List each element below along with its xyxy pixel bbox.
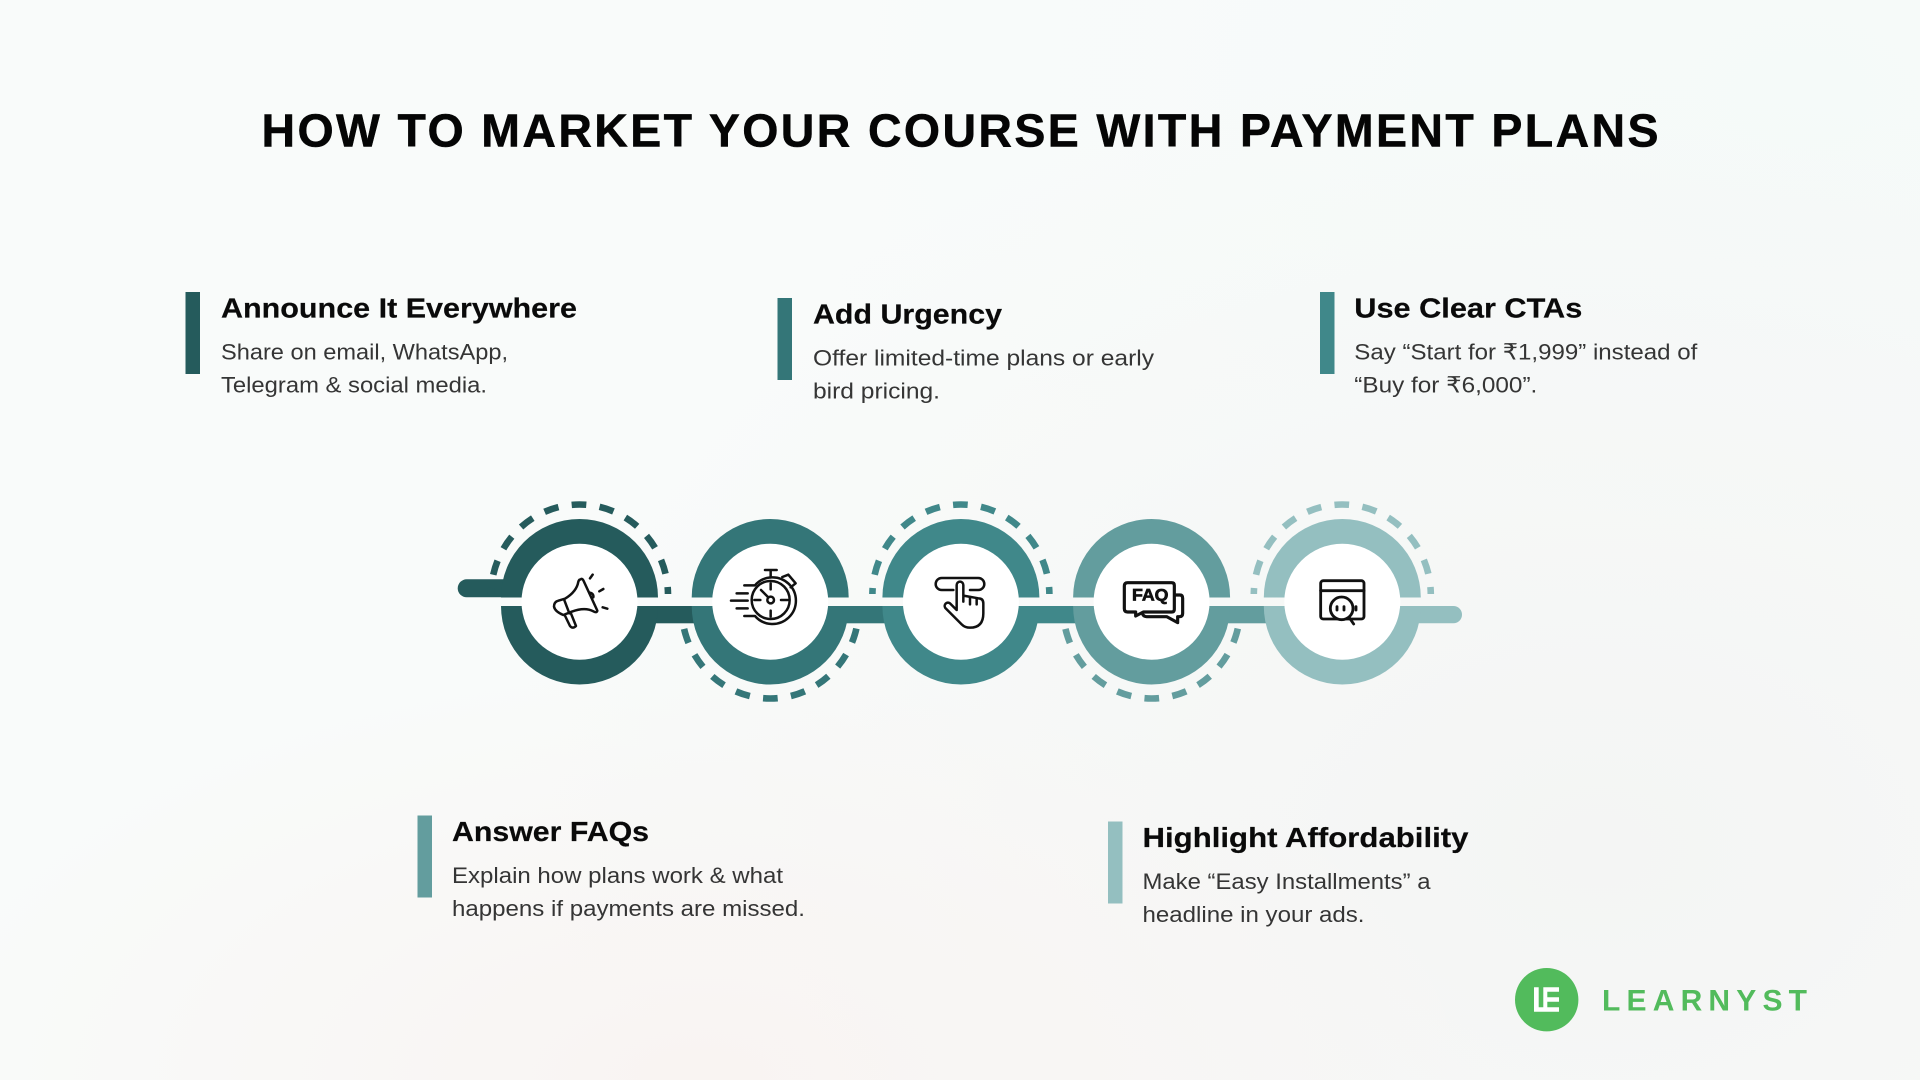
- panel: add urgency: [778, 298, 1155, 404]
- panel: highlight affordability: [1108, 822, 1469, 927]
- icon: FAQ chat bubbles: FAQ: [1132, 586, 1168, 605]
- panel: announce it everywhere: Share on email, WhatsApp,: [221, 339, 508, 364]
- panel: announce it everywhere: Announce It Everywhere: [221, 292, 577, 323]
- ring 1: [501, 519, 658, 685]
- icon: pointing hand: [936, 578, 984, 628]
- panel: use clear CTAs: [1320, 292, 1698, 398]
- icon: megaphone: [554, 575, 607, 628]
- panel: use clear CTAs: “Buy for ₹6,000”.: [1354, 373, 1537, 398]
- panel: answer FAQs: Answer FAQs: [452, 816, 649, 847]
- panel: answer FAQs: Explain how plans work & what: [452, 863, 784, 888]
- panel: highlight affordability: Make “Easy Installments” a: [1142, 869, 1431, 894]
- panel: announce it everywhere: Telegram & social media.: [221, 373, 487, 398]
- panel: add urgency: Offer limited-time plans or early: [813, 345, 1155, 370]
- panel: highlight affordability: Highlight Affordability: [1142, 822, 1469, 853]
- panel: announce it everywhere: [186, 292, 577, 398]
- icon: stopwatch: [731, 570, 796, 624]
- icon: FAQ chat bubbles: [1124, 583, 1183, 623]
- logo: Learnyst: LEARNYST: [1602, 985, 1807, 1018]
- ring 5: [1264, 519, 1421, 685]
- ring 3: [882, 519, 1039, 685]
- ring 2: [692, 519, 849, 685]
- logo: Learnyst: [1515, 968, 1807, 1031]
- connector lines: [458, 579, 1462, 623]
- panel: use clear CTAs: Say “Start for ₹1,999” instead of: [1354, 339, 1698, 364]
- ring 4: [1073, 519, 1230, 685]
- panel: add urgency: Add Urgency: [813, 298, 1003, 329]
- logo mark: [1515, 968, 1578, 1031]
- panel: add urgency: bird pricing.: [813, 379, 940, 404]
- panel: use clear CTAs: Use Clear CTAs: [1354, 292, 1582, 323]
- panel: answer FAQs: [418, 816, 805, 921]
- title: HOW TO MARKET YOUR COURSE WITH PAYMENT PLANS: [262, 105, 1658, 157]
- timeline diagram: [458, 504, 1462, 698]
- panel: answer FAQs: happens if payments are missed.: [452, 896, 805, 921]
- icon: browser with magnifier: [1321, 581, 1364, 624]
- dashed arcs: [491, 504, 1431, 698]
- panel: highlight affordability: headline in your ads.: [1142, 902, 1364, 927]
